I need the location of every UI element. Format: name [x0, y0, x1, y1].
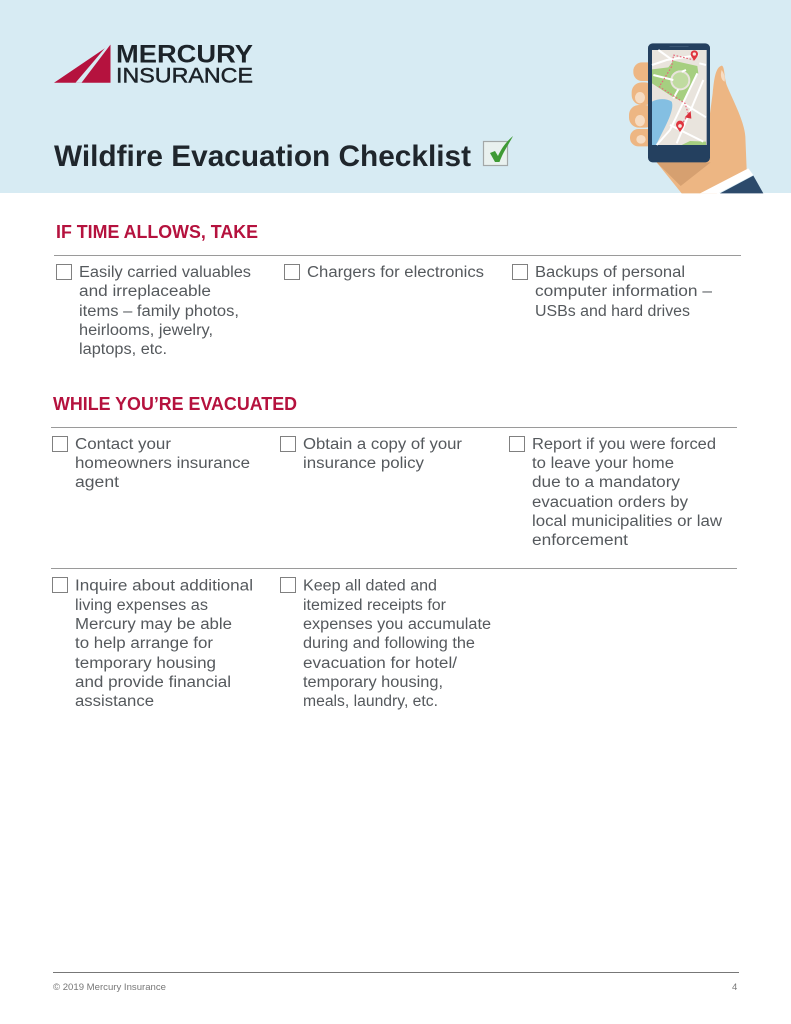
checklist item: contact agent: Contact your [75, 436, 171, 453]
checklist item: report evacuation: to leave your home [532, 455, 674, 472]
checklist item: report evacuation: due to a mandatory [532, 474, 680, 491]
illustration: hand holding phone with map [629, 43, 763, 193]
checklist item: report evacuation: local municipalities or law [532, 513, 723, 530]
checklist item: backups [512, 264, 712, 320]
checklist item: obtain policy [280, 436, 462, 472]
checklist item: obtain policy: insurance policy [303, 455, 424, 472]
icon: green check box [484, 136, 513, 166]
checklist item: living expenses: Inquire about additional [75, 578, 253, 594]
checklist item: keep receipts: Keep all dated and [303, 578, 437, 594]
checklist item: keep receipts: itemized receipts for [303, 597, 446, 614]
checklist item: obtain policy: Obtain a copy of your [303, 436, 462, 453]
title: Wildfire Evacuation Checklist [54, 140, 471, 173]
checklist item: keep receipts: evacuation for hotel/ [303, 655, 458, 672]
logo: Mercury Insurance [54, 41, 253, 87]
checklist item: valuables: and irreplaceable [79, 283, 211, 300]
phone body [648, 43, 710, 162]
checklist item: living expenses: living expenses as [75, 597, 208, 614]
checklist item: contact agent [52, 436, 250, 491]
checklist item: living expenses: assistance [75, 693, 154, 710]
footer page number: 4 [732, 982, 737, 993]
phone map screen [652, 50, 707, 145]
checklist item: keep receipts: meals, laundry, etc. [303, 693, 438, 710]
checklist item: keep receipts: expenses you accumulate [303, 616, 491, 633]
checklist item: backups: Backups of personal [535, 264, 685, 281]
checklist item: backups: USBs and hard drives [535, 303, 690, 320]
checklist item: living expenses: to help arrange for [75, 635, 213, 652]
hand [629, 62, 752, 193]
heading: if time allows, take: IF TIME ALLOWS, TAKE [56, 221, 258, 242]
checklist item: living expenses: temporary housing [75, 655, 216, 672]
shirt cuff and sleeve [700, 168, 763, 193]
logo: Mercury Insurance: INSURANCE [116, 64, 253, 87]
checklist item: valuables: heirlooms, jewelry, [79, 322, 213, 339]
checklist item: valuables: laptops, etc. [79, 341, 167, 358]
footer copyright: © 2019 Mercury Insurance [53, 982, 166, 993]
checklist item: report evacuation: evacuation orders by [532, 494, 688, 511]
checklist item: chargers: Chargers for electronics [307, 264, 484, 281]
checklist item: living expenses: and provide financial [75, 674, 231, 691]
logo: Mercury Insurance: MERCURY [116, 41, 253, 69]
checklist item: keep receipts: during and following the [303, 635, 475, 652]
checklist item: keep receipts [280, 578, 491, 710]
checklist item: valuables: items – family photos, [79, 303, 239, 320]
checklist item: valuables [56, 264, 251, 358]
checklist item: report evacuation [510, 436, 723, 549]
checklist item: living expenses [52, 578, 253, 710]
checklist item: valuables: Easily carried valuables [79, 264, 251, 281]
heading: while you're evacuated: WHILE YOU’RE EVACUATED [53, 393, 297, 414]
checklist item: report evacuation: enforcement [532, 532, 629, 549]
checklist item: contact agent: homeowners insurance [75, 455, 250, 472]
checklist item: contact agent: agent [75, 474, 120, 491]
checklist item: report evacuation: Report if you were forced [532, 436, 716, 453]
checklist item: keep receipts: temporary housing, [303, 674, 443, 691]
header band [0, 0, 791, 193]
checklist item: backups: computer information – [535, 283, 712, 300]
checklist item: living expenses: Mercury may be able [75, 616, 232, 633]
